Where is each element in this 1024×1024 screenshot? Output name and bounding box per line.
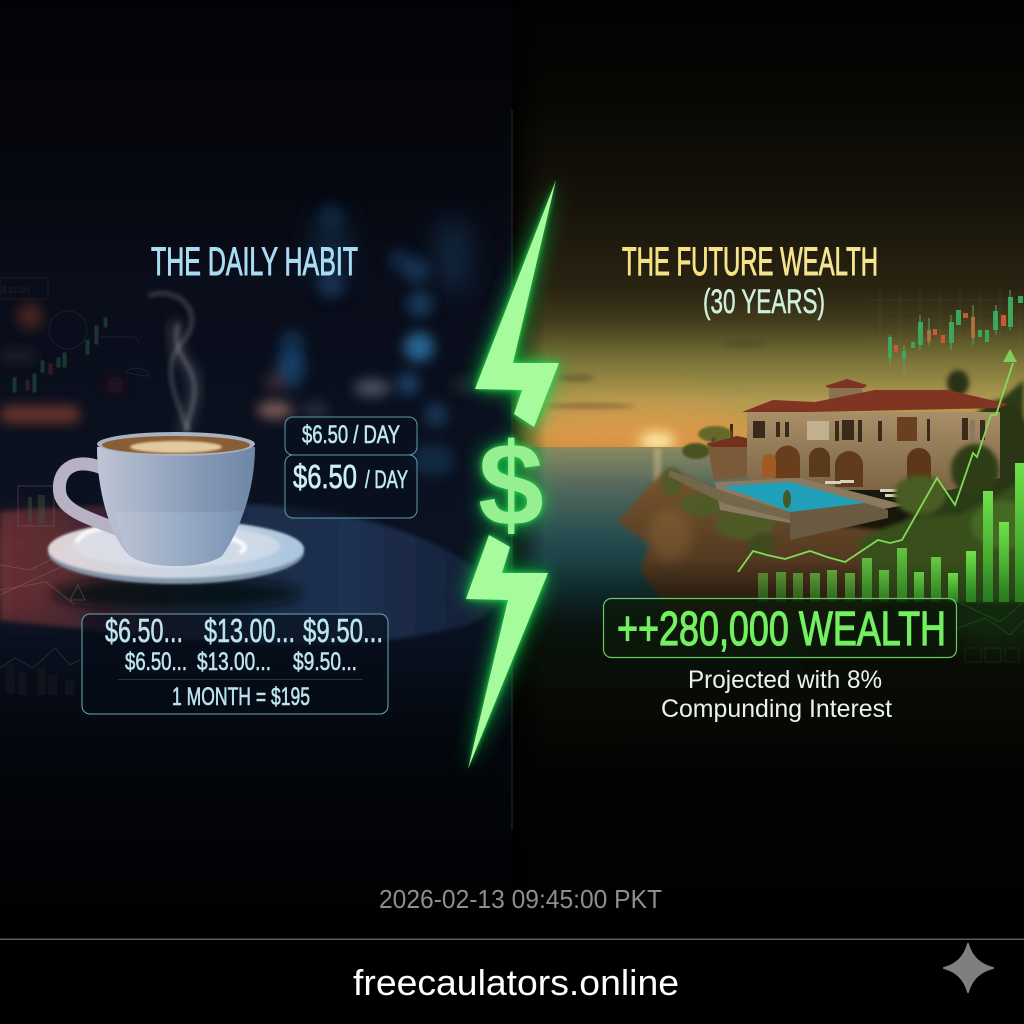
callout: daily cost lower: / DAY: [365, 466, 408, 494]
icon: sparkle: [944, 944, 993, 992]
swimming pool terrace: [668, 470, 905, 540]
cup body: [97, 447, 255, 566]
saucer: [48, 520, 304, 584]
chart: faint HUD candles left: [0, 278, 149, 392]
callout: daily cost upper: $6.50 / DAY: [302, 421, 400, 449]
text: projection note: Projected with 8%: [688, 666, 882, 694]
chart: faint HUD candles left: $ 01181: [2, 286, 31, 295]
text: projection note: [661, 666, 892, 723]
icon: coffee cup and saucer: [48, 432, 304, 584]
foreground greenery: [860, 444, 1024, 602]
footer: [0, 938, 1024, 1024]
bolt top: [475, 180, 559, 427]
heading: the future wealth: (30 YEARS): [703, 283, 825, 321]
growth line with arrow: [738, 349, 1017, 572]
text: timestamp: 2026-02-13 09:45:00 PKT: [379, 884, 662, 914]
callout: daily cost upper: [285, 417, 417, 455]
land greenery background: [860, 370, 1024, 600]
callout: daily cost lower: [285, 455, 417, 518]
callout: monthly totals: 1 MONTH = $195: [172, 683, 310, 711]
sky: [512, 290, 1024, 448]
panel: left daily habit scene: [0, 0, 512, 940]
bolt bottom: [466, 535, 548, 769]
fade overlays: [512, 0, 1024, 940]
centre divider: [512, 110, 513, 830]
text: site name: freecaulators.online: [353, 962, 679, 1003]
callout: monthly totals: $6.50...: [105, 612, 183, 649]
heading: the daily habit: THE DAILY HABIT: [151, 240, 358, 284]
text: projection note: Compunding Interest: [661, 695, 892, 723]
sea: [512, 447, 802, 687]
chart: candlesticks top right: [870, 290, 1024, 375]
callout: monthly totals: $9.50...: [303, 612, 383, 649]
cup handle: [59, 464, 122, 531]
cliff: [618, 468, 880, 640]
cup lower reflection: [115, 511, 243, 566]
callout: monthly totals: $6.50...: [125, 648, 187, 676]
icon: lightning bolts with dollar sign: [466, 180, 559, 769]
cup rim and coffee: [97, 432, 255, 456]
steam: [150, 293, 195, 432]
callout: monthly totals: $13.00...: [197, 648, 271, 676]
icon: lightning bolts with dollar sign: $: [478, 419, 544, 551]
dollar sign: $: [478, 419, 544, 551]
table: [0, 486, 495, 695]
callout: daily cost lower: $6.50: [293, 458, 357, 495]
callout: monthly totals: [82, 612, 388, 714]
bar chart: [758, 463, 1024, 602]
sun glow: [530, 341, 767, 467]
panel: right future wealth scene: [512, 0, 1024, 940]
faint HUD lower right: [958, 602, 1024, 662]
callout: monthly totals: $9.50...: [293, 648, 357, 676]
callout: monthly totals: $13.00...: [204, 612, 295, 649]
heading: the future wealth: [622, 240, 878, 321]
villa: [682, 379, 1008, 490]
icon: lightning bolts with dollar sign: $: [478, 419, 544, 551]
